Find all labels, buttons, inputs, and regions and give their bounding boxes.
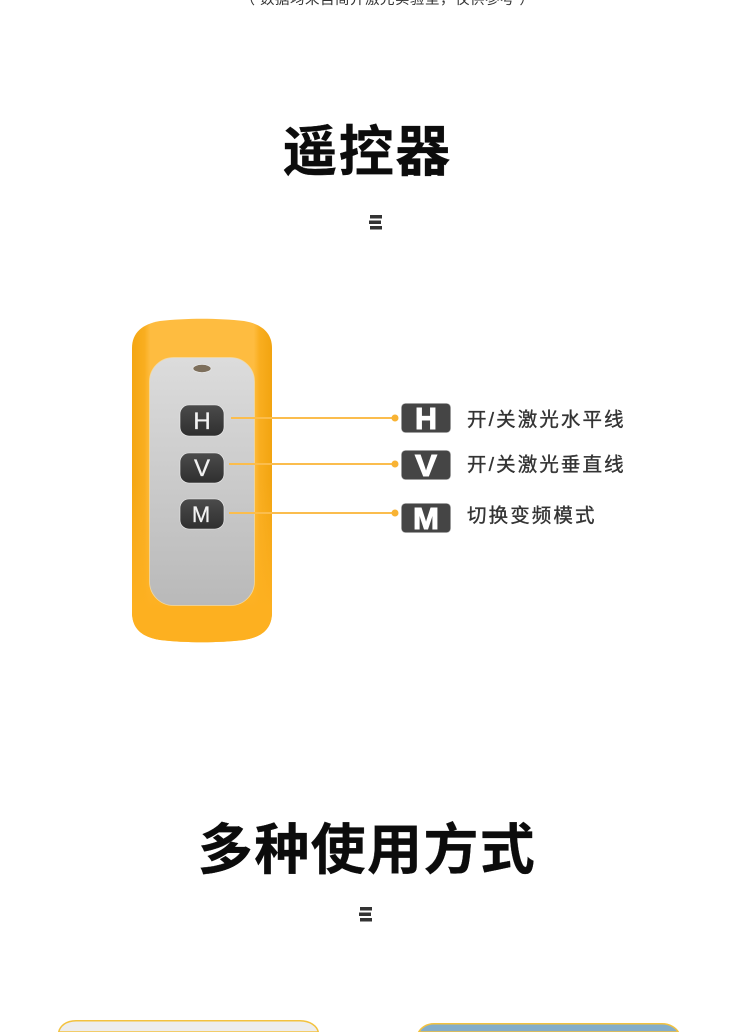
label: frequency mode: 切换变频模式 bbox=[467, 505, 597, 527]
badge M: M bbox=[413, 501, 439, 536]
heading: usage modes: 多种使用方式 bbox=[198, 819, 536, 881]
leader line M bbox=[229, 510, 398, 516]
button V: V bbox=[194, 455, 210, 482]
button M bbox=[180, 499, 224, 529]
button H bbox=[180, 405, 224, 436]
label: vertical line toggle: 开/关激光垂直线 bbox=[467, 454, 626, 476]
remote body bbox=[132, 319, 272, 642]
leader line H bbox=[231, 414, 398, 422]
badge V bbox=[402, 448, 450, 483]
indicator light bbox=[193, 364, 211, 372]
badge M bbox=[402, 501, 450, 536]
icon: section marker 1 bbox=[369, 215, 382, 230]
leader line V bbox=[229, 460, 398, 468]
card: right usage photo bbox=[419, 1024, 678, 1032]
heading: remote control: 遥控器 bbox=[282, 121, 452, 183]
badge H: H bbox=[415, 401, 437, 436]
icon: section marker 2 bbox=[359, 907, 372, 922]
button M: M bbox=[192, 502, 210, 527]
remote face panel bbox=[150, 358, 254, 606]
button H: H bbox=[193, 408, 211, 435]
badge V: V bbox=[415, 448, 437, 483]
button V bbox=[180, 453, 224, 483]
badge H bbox=[402, 401, 450, 436]
card: left usage photo bbox=[59, 1021, 318, 1032]
label: horizontal line toggle: 开/关激光水平线 bbox=[467, 409, 626, 431]
